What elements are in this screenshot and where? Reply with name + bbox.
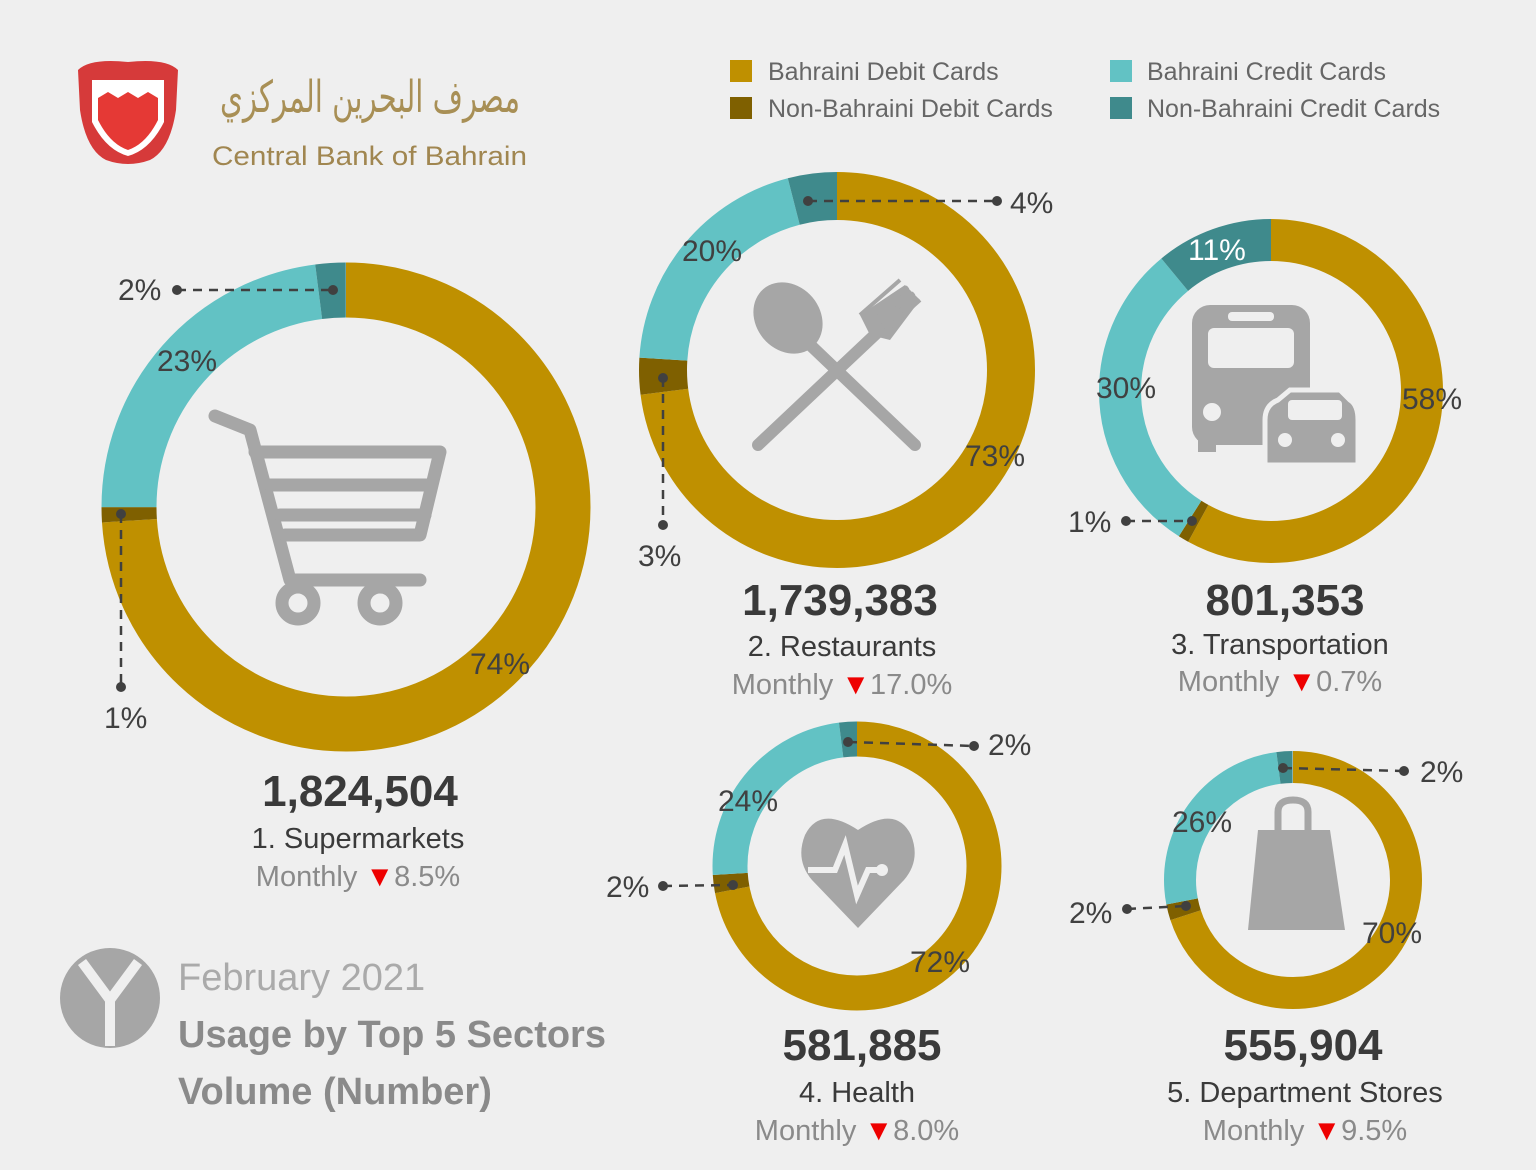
labels: restaurants: 4%: [1010, 187, 1053, 220]
legend: Non-Bahraini Credit Cards: [1147, 95, 1440, 123]
labels: supermarkets: 2%: [118, 274, 161, 307]
legend: Non-Bahraini Debit Cards: [768, 95, 1053, 123]
labels: health: 72%: [910, 946, 970, 979]
labels: department stores: 2%: [1069, 897, 1112, 930]
legend: Bahraini Debit Cards: [768, 58, 999, 86]
labels: health: 2%: [988, 729, 1031, 762]
labels: health: 2%: [606, 871, 649, 904]
stats: health: 581,885: [782, 1021, 942, 1070]
stats: department stores: [1167, 1021, 1443, 1147]
labels: supermarkets: 23%: [157, 345, 217, 378]
stats: transportation: 3. Transportation: [1171, 629, 1389, 661]
labels: restaurants: 3%: [638, 540, 681, 573]
donut: restaurants: [663, 196, 1011, 544]
stats: supermarkets: [252, 767, 464, 893]
donut: health: [730, 739, 984, 993]
legend: Bahraini Credit Cards: [1147, 58, 1386, 86]
labels: department stores: 70%: [1362, 917, 1422, 950]
title block: February 2021: [178, 957, 425, 999]
stats: department stores: 5. Department Stores: [1167, 1077, 1443, 1109]
stats: restaurants: [732, 576, 952, 701]
icon: Y logo: [60, 948, 160, 1048]
icon: spoon and fork: [739, 268, 920, 445]
labels: transportation: [1068, 234, 1462, 539]
donut: transportation: [1120, 240, 1422, 542]
arabic name: مصرف البحرين المركزي: [220, 72, 520, 123]
donut: department stores: [1180, 767, 1406, 993]
icon: bus and car: [1192, 305, 1358, 465]
labels: department stores: [1069, 756, 1463, 950]
stats: department stores: Monthly ▼9.5%: [1203, 1115, 1407, 1147]
legend: [730, 58, 1440, 123]
stats: restaurants: 1,739,383: [742, 576, 938, 625]
icon: cart: [215, 416, 440, 619]
labels: restaurants: 20%: [682, 235, 742, 268]
labels: transportation: 30%: [1096, 372, 1156, 405]
labels: supermarkets: [104, 274, 530, 735]
donut: supermarkets: [129, 290, 563, 724]
stats: restaurants: Monthly ▼17.0%: [732, 669, 952, 701]
labels: transportation: 1%: [1068, 506, 1111, 539]
stats: health: 4. Health: [799, 1077, 915, 1109]
stats: supermarkets: 1,824,504: [262, 767, 458, 816]
labels: transportation: 58%: [1402, 383, 1462, 416]
stats: restaurants: 2. Restaurants: [748, 631, 936, 663]
icon: emblem: [78, 61, 178, 164]
labels: health: [606, 729, 1031, 979]
title block: Usage by Top 5 Sectors: [178, 1014, 606, 1056]
labels: restaurants: 73%: [965, 440, 1025, 473]
icon: heart: [801, 819, 915, 928]
stats: transportation: 801,353: [1205, 576, 1365, 625]
labels: supermarkets: 1%: [104, 702, 147, 735]
english name: Central Bank of Bahrain: [212, 141, 527, 171]
labels: department stores: 2%: [1420, 756, 1463, 789]
stats: health: Monthly ▼8.0%: [755, 1115, 959, 1147]
stats: department stores: 555,904: [1223, 1021, 1383, 1070]
labels: department stores: 26%: [1172, 806, 1232, 839]
stats: transportation: Monthly ▼0.7%: [1178, 666, 1382, 698]
title block: Volume (Number): [178, 1071, 492, 1113]
labels: health: 24%: [718, 785, 778, 818]
stats: transportation: [1171, 576, 1389, 698]
stats: health: [755, 1021, 959, 1147]
stats: supermarkets: Monthly ▼8.5%: [256, 861, 460, 893]
labels: transportation: 11%: [1188, 234, 1246, 267]
labels: supermarkets: 74%: [470, 648, 530, 681]
logo: Central Bank of Bahrain: [78, 61, 527, 171]
labels: restaurants: [638, 187, 1053, 573]
stats: supermarkets: 1. Supermarkets: [252, 823, 464, 855]
title block: [178, 957, 606, 1113]
icon: shopping bag: [1248, 800, 1345, 930]
